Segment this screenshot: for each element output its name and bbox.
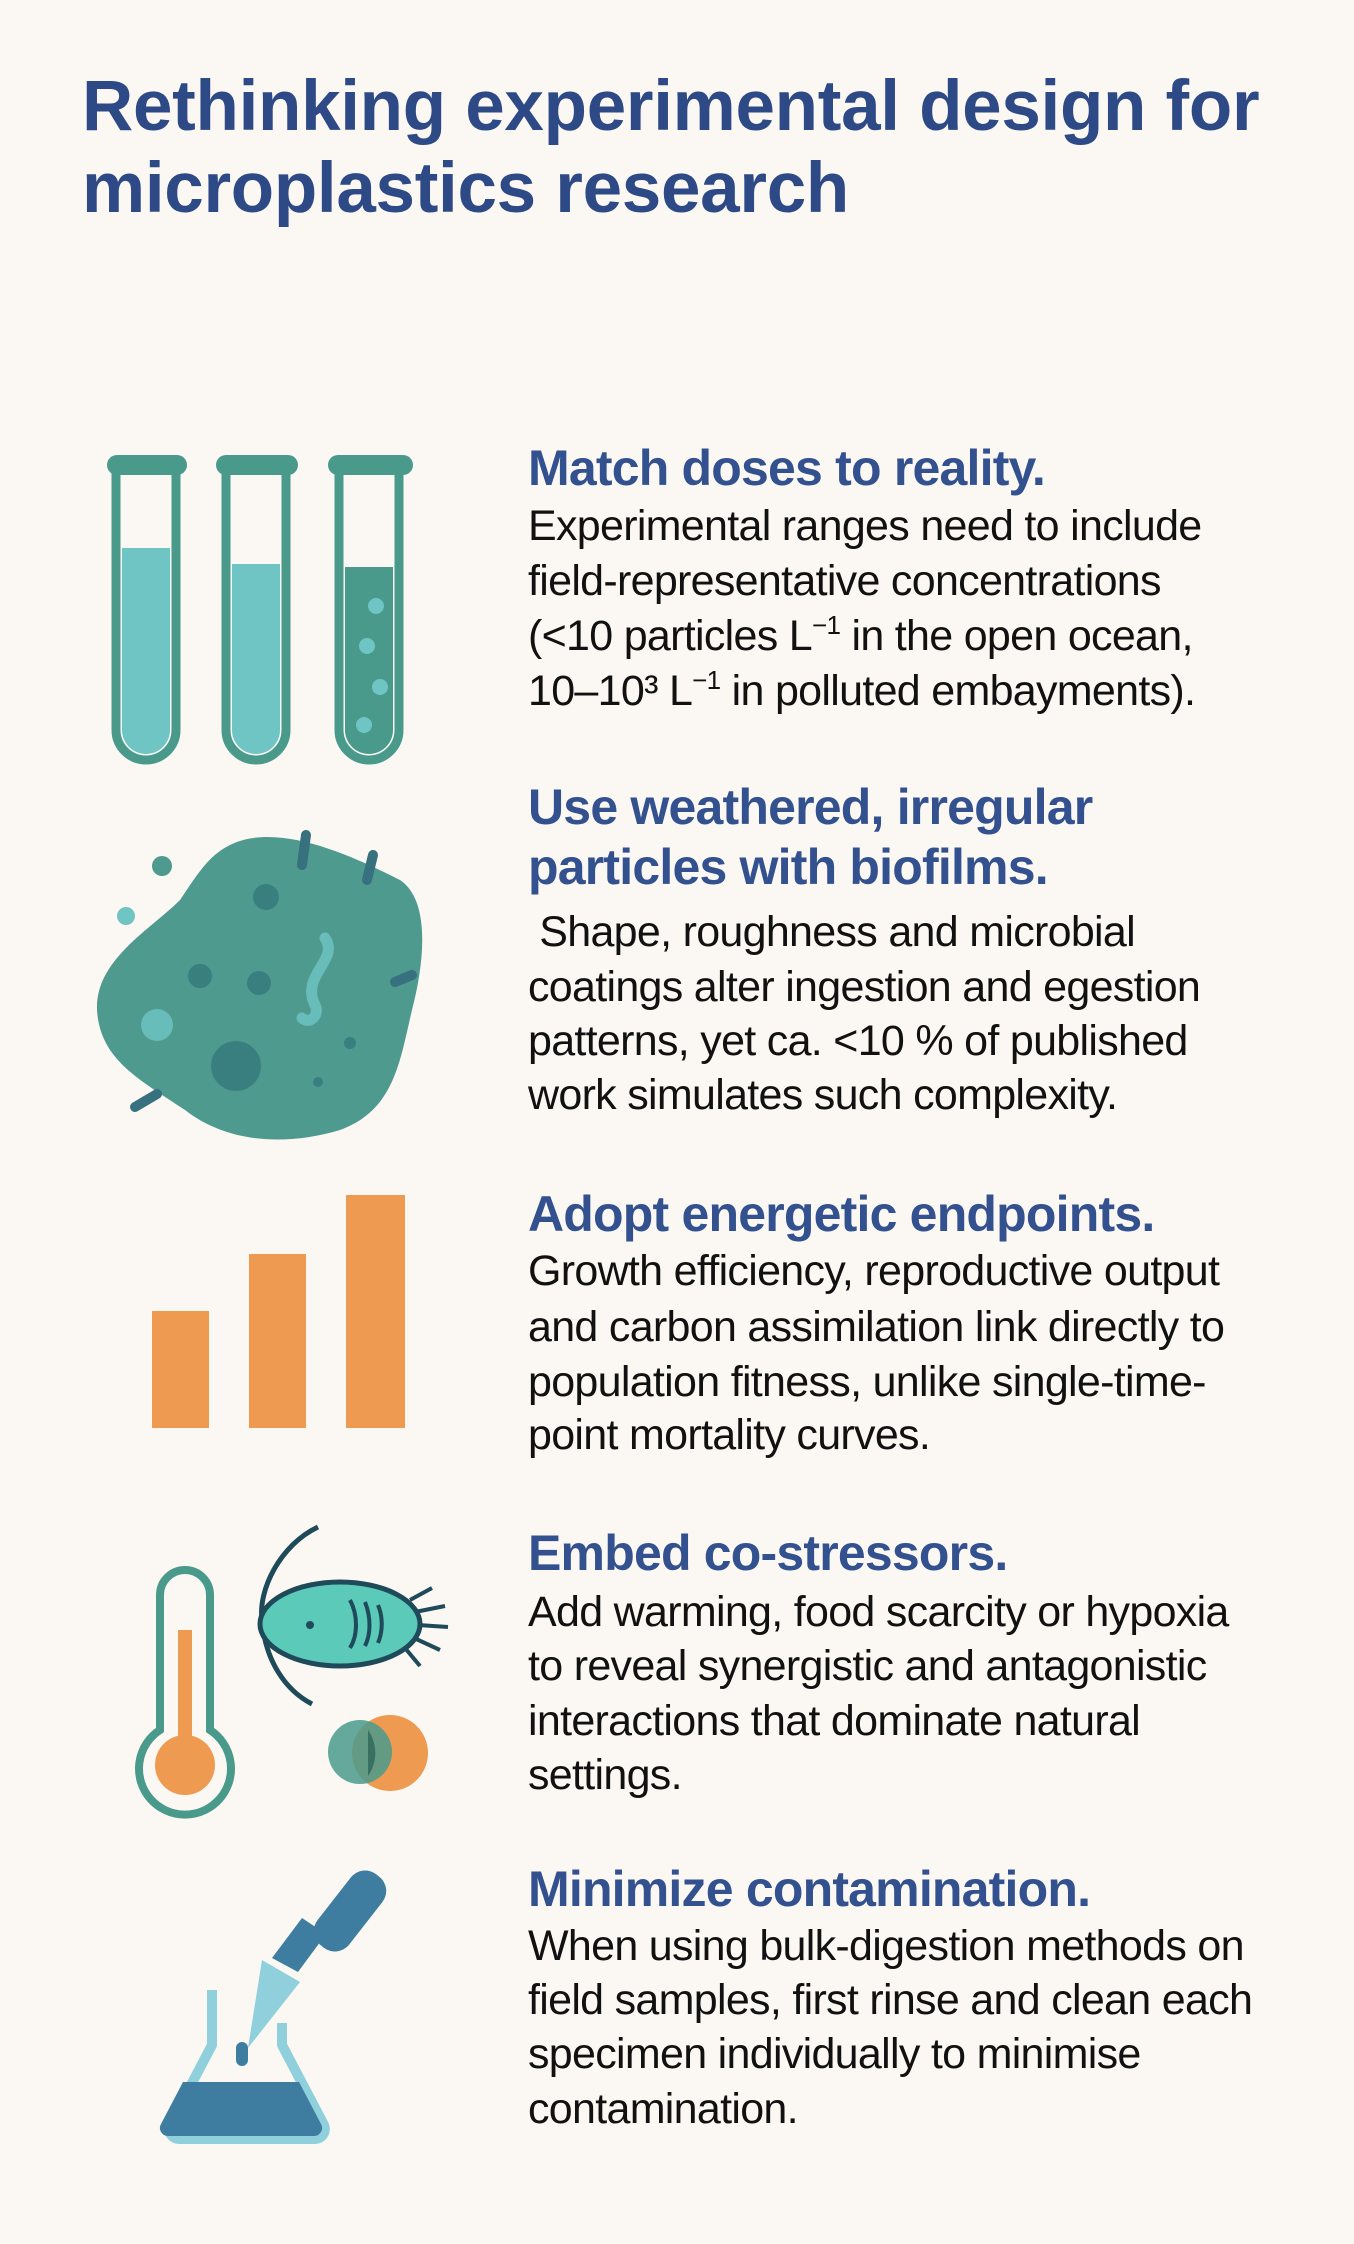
section 2: weathered particles: Shape, roughness and microbial [539, 908, 1135, 956]
section 4: co-stressors: Add warming, food scarcity or hypoxia [528, 1588, 1229, 1636]
section 5: contamination: specimen individually to minimise [528, 2030, 1141, 2078]
section 1: match doses: Match doses to reality. [528, 440, 1045, 496]
title: microplastics research [82, 149, 849, 228]
section 2: weathered particles: patterns, yet ca. <10 % of published [528, 1017, 1188, 1065]
section 5: contamination: When using bulk-digestion methods on [528, 1922, 1244, 1970]
section 4: co-stressors [528, 1525, 1230, 1799]
section 4: co-stressors: interactions that dominate natural [528, 1697, 1140, 1745]
icon: overlapping circles [328, 1715, 428, 1791]
icon: dropper and flask [160, 1863, 393, 2139]
section 2: weathered particles [528, 779, 1200, 1119]
section 1: match doses [528, 440, 1202, 715]
section 3: energetic endpoints: Adopt energetic endpoints. [528, 1186, 1154, 1242]
title: Rethinking experimental design for [82, 67, 1259, 146]
section 4: co-stressors: to reveal synergistic and antagonistic [528, 1642, 1207, 1690]
section 1: match doses: field-representative concentrations [528, 557, 1161, 605]
section 1: match doses: 10–10³ L−1 in polluted embayments). [528, 665, 1195, 715]
section 2: weathered particles: particles with biofilms. [528, 839, 1048, 895]
icon: biofilm particle [97, 835, 422, 1140]
section 4: co-stressors: Embed co-stressors. [528, 1525, 1007, 1581]
section 3: energetic endpoints: population fitness, unlike single-time- [528, 1358, 1206, 1406]
section 2: weathered particles: work simulates such complexity. [528, 1071, 1117, 1119]
icon: copepod [260, 1527, 448, 1704]
section 3: energetic endpoints [528, 1186, 1224, 1459]
section 3: energetic endpoints: Growth efficiency, reproductive output [528, 1247, 1219, 1295]
section 2: weathered particles: coatings alter ingestion and egestion [528, 963, 1200, 1011]
section 5: contamination [528, 1861, 1252, 2133]
section 2: weathered particles: Use weathered, irregular [528, 779, 1092, 835]
section 1: match doses: Experimental ranges need to include [528, 502, 1202, 550]
icon: bar chart [152, 1195, 405, 1428]
section 5: contamination: field samples, first rinse and clean each [528, 1976, 1252, 2024]
section 3: energetic endpoints: and carbon assimilation link directly to [528, 1303, 1224, 1351]
icon: thermometer [139, 1570, 231, 1815]
section 3: energetic endpoints: point mortality curves. [528, 1411, 930, 1459]
section 4: co-stressors: settings. [528, 1751, 682, 1799]
section 1: match doses: (<10 particles L−1 in the open ocean, [528, 610, 1193, 660]
section 5: contamination: Minimize contamination. [528, 1861, 1090, 1917]
section 5: contamination: contamination. [528, 2085, 798, 2133]
icon: test tubes [107, 455, 413, 760]
title [82, 67, 1259, 228]
